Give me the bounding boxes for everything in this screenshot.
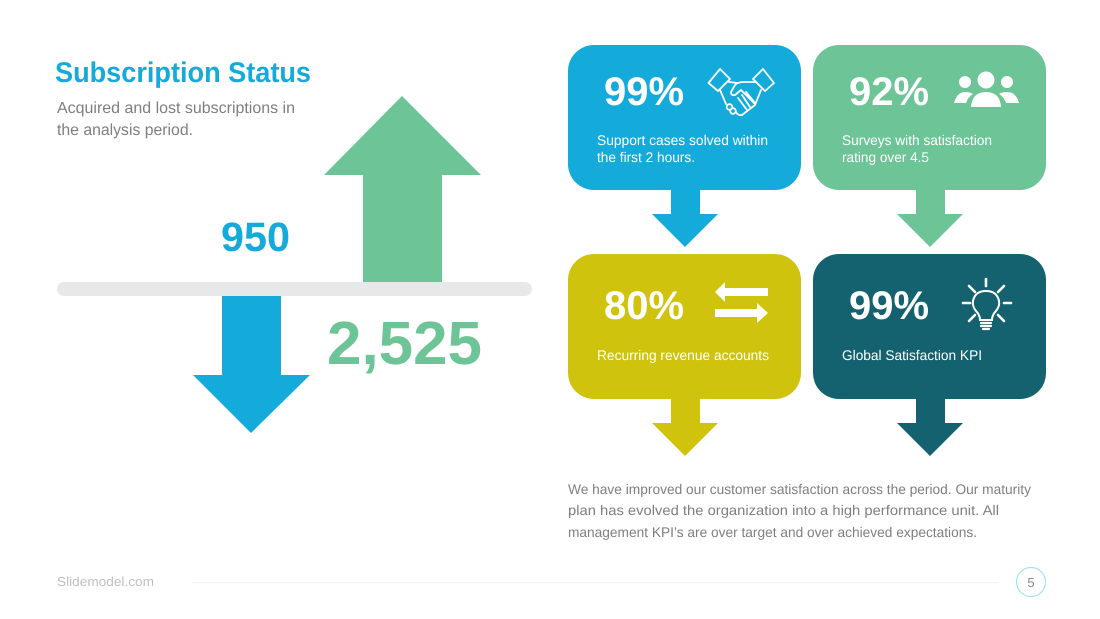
description: Surveys with satisfaction — [842, 132, 992, 148]
panel: global satisfaction — [813, 254, 1046, 456]
subtitle text: Acquired and lost subscriptions in — [57, 100, 295, 117]
footer brand: Slidemodel.com — [57, 574, 154, 589]
stat 99%: 99% — [604, 70, 684, 114]
paragraph: We have improved our customer satisfaction across the period. Our maturity — [568, 481, 1031, 497]
number 950: 950 — [221, 214, 290, 260]
horizontal bar — [57, 282, 532, 296]
description: rating over 4.5 — [842, 149, 929, 165]
title: Subscription Status — [55, 57, 311, 89]
description — [597, 132, 768, 165]
icon: handshake — [708, 69, 774, 115]
page number: 5 — [1027, 575, 1035, 590]
green up arrow — [324, 96, 481, 283]
panel: recurring revenue — [568, 254, 801, 456]
description: Support cases solved within — [597, 132, 768, 148]
description — [842, 132, 992, 165]
icon: light bulb — [963, 279, 1011, 329]
description: Recurring revenue accounts — [597, 347, 769, 363]
stat 80%: 80% — [604, 284, 684, 328]
description: Global Satisfaction KPI — [842, 347, 982, 363]
panel: surveys — [813, 45, 1046, 247]
icon: people — [954, 72, 1019, 107]
subtitle text — [57, 100, 295, 139]
icon: exchange arrows — [715, 282, 768, 323]
page number — [1016, 568, 1046, 596]
paragraph: plan has evolved the organization into a high performance unit. All — [568, 502, 999, 518]
stat 92%: 92% — [849, 70, 929, 114]
blue down arrow — [193, 296, 310, 433]
description: the first 2 hours. — [597, 149, 695, 165]
panel: support cases — [568, 45, 801, 247]
stat 99%: 99% — [849, 284, 929, 328]
paragraph: management KPI’s are over target and over achieved expectations. — [568, 524, 977, 540]
subtitle text: the analysis period. — [57, 122, 193, 139]
number 2,525: 2,525 — [327, 309, 482, 377]
paragraph — [568, 481, 1031, 540]
